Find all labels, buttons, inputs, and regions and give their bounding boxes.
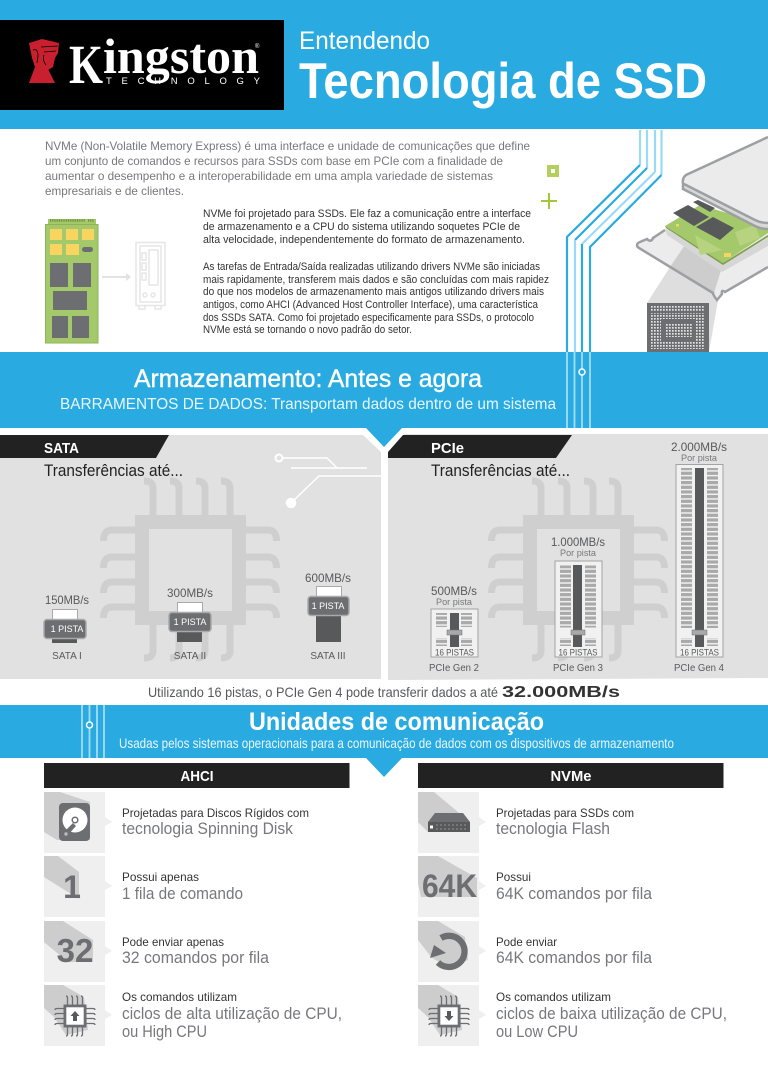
row: 64K commands: 64K comandos por fila <box>496 949 653 967</box>
PCIe Gen 3 slot <box>551 535 605 674</box>
PCIe Gen 4 slot <box>671 440 727 674</box>
icon: green plus <box>541 193 557 209</box>
SATA tag <box>0 435 169 458</box>
transfer heading: Transferências até... <box>44 461 183 480</box>
PCIe Gen 3 slot: Por pista <box>560 548 597 559</box>
NVMe design paragraph <box>203 208 531 246</box>
PCIe summary line: 32.000MB/s <box>502 684 620 701</box>
NVMe header: NVMe <box>550 768 592 785</box>
row: 64K commands: Pode enviar <box>496 935 557 949</box>
arrow: board to device <box>102 273 131 281</box>
SATA III connector: SATA III <box>310 651 346 662</box>
icon: green square <box>547 165 559 177</box>
PCIe Gen 4 slot: 2.000MB/s <box>671 440 727 454</box>
row: low CPU: ou Low CPU <box>496 1023 578 1041</box>
PCIe Gen 4 slot: PCIe Gen 4 <box>674 663 724 674</box>
header band <box>0 0 768 129</box>
SATA I connector: SATA I <box>52 651 82 662</box>
row: one queue: Possui apenas <box>122 870 199 884</box>
AHCI header: AHCI <box>180 768 214 785</box>
AHCI header <box>44 763 350 788</box>
PCIe tag <box>388 435 572 458</box>
NVMe tasks paragraph <box>203 261 549 336</box>
Kingston logo <box>0 20 284 110</box>
heading: Armazenamento: Antes e agora <box>134 365 482 393</box>
NVMe tasks paragraph: mais rapidamente, transferem mais dados e são concluídas com mais rapidez <box>203 274 549 286</box>
intro paragraph <box>45 139 530 198</box>
PCIe Gen 2 slot: PCIe Gen 2 <box>429 663 479 674</box>
header title: Entendendo <box>299 27 430 55</box>
subheading: Usadas pelos sistemas operacionais para a comunicação de dados com os dispositivos de armazenamento <box>119 735 674 751</box>
row: spinning disk: Projetadas para Discos Rígidos com <box>122 806 309 820</box>
top casing <box>683 137 768 229</box>
SATA II connector: 300MB/s <box>167 586 213 600</box>
row: flash: tecnologia Flash <box>496 820 610 838</box>
transfer heading: Transferências até... <box>431 461 570 480</box>
PCIe Gen 3 slot: PCIe Gen 3 <box>553 663 603 674</box>
row: low CPU: ciclos de baixa utilização de CPU, <box>496 1005 727 1023</box>
PCIe tag: PCIe <box>431 440 464 457</box>
Kingston logo: ® <box>255 43 260 50</box>
row: spinning disk: tecnologia Spinning Disk <box>122 820 294 838</box>
row: 64K commands <box>418 921 653 982</box>
heading: Unidades de comunicação <box>249 708 544 736</box>
row: 64K queues <box>418 856 653 917</box>
intro paragraph: aumentar o desempenho e a interoperabilidade em uma ampla variedade de sistemas <box>45 169 493 183</box>
icon: CPU arrow up <box>55 996 95 1036</box>
icon: host device <box>136 242 165 309</box>
NVMe tasks paragraph: As tarefas de Entrada/Saída realizadas utilizando drivers NVMe são iniciadas <box>203 261 540 273</box>
light projection beam <box>647 267 718 352</box>
board shadow <box>665 228 768 272</box>
band: Armazenamento <box>0 352 768 428</box>
SSD exploded illustration <box>637 137 768 352</box>
row: high CPU: ciclos de alta utilização de CPU, <box>122 1005 342 1023</box>
PCIe Gen 4 slot: Por pista <box>681 453 718 464</box>
row: spinning disk <box>44 792 309 853</box>
icon: number 1: 1 <box>63 869 81 905</box>
row: high CPU: ou High CPU <box>122 1023 207 1041</box>
green circuit board <box>665 205 768 263</box>
SATA II connector <box>167 586 213 662</box>
row: high CPU: Os comandos utilizam <box>122 990 237 1004</box>
PCIe Gen 3 slot: 1.000MB/s <box>551 535 605 549</box>
row: 64K queues: Possui <box>496 870 531 884</box>
PCIe Gen 3 slot: 16 PISTAS <box>558 648 598 658</box>
NVMe tasks paragraph: NVMe está se tornando o novo padrão do setor. <box>203 324 412 336</box>
PCIe Gen 2 slot: Por pista <box>436 597 473 608</box>
panel: PCIe <box>388 434 768 680</box>
NVMe design paragraph: NVMe foi projetado para SSDs. Ele faz a comunicação entre a interface <box>203 208 531 220</box>
SATA I connector: 150MB/s <box>45 593 89 607</box>
row: flash <box>418 792 634 853</box>
NVMe header <box>418 763 724 788</box>
SATA II connector: SATA II <box>174 651 206 662</box>
arrow: section pointer <box>366 428 402 447</box>
NVMe design paragraph: de armazenamento e a CPU do sistema utilizando soquetes PCIe de <box>203 221 520 233</box>
NVMe design paragraph: alta velocidade, independentemente do formato de armazenamento. <box>203 234 525 246</box>
row: low CPU: Os comandos utilizam <box>496 990 611 1004</box>
circuit traces <box>276 454 381 508</box>
icon: M.2 SSD board <box>46 219 98 343</box>
SATA III connector: 600MB/s <box>305 571 351 585</box>
PCIe Gen 2 slot: 16 PISTAS <box>435 648 474 658</box>
icon: number 32: 32 <box>57 932 93 969</box>
BGA chip <box>647 303 709 352</box>
arrow: section pointer <box>366 758 402 777</box>
intro paragraph: empresariais e de clientes. <box>45 184 184 198</box>
icon: SSD drive <box>428 813 470 832</box>
PCIe Gen 2 slot: 500MB/s <box>431 584 477 598</box>
PCIe Gen 4 slot: 16 PISTAS <box>680 648 719 658</box>
SATA III connector <box>305 571 351 662</box>
icon: CPU arrow down <box>429 996 469 1036</box>
subheading: BARRAMENTOS DE DADOS: Transportam dados dentro de um sistema <box>60 396 556 413</box>
Kingston logo: K <box>69 34 103 95</box>
flash chips <box>673 205 709 226</box>
panel: SATA <box>0 435 381 679</box>
NVMe tasks paragraph: antigos, como AHCI (Advanced Host Controller Interface), uma característica <box>203 299 539 311</box>
SATA I connector: 1 PISTA <box>51 624 83 634</box>
base plate <box>637 200 768 300</box>
SATA III connector: 1 PISTA <box>312 601 344 611</box>
row: high CPU <box>44 985 342 1046</box>
SATA tag: SATA <box>44 440 79 457</box>
icon: red Kingston head <box>29 39 59 83</box>
icon: refresh <box>430 936 465 967</box>
row: 32 commands: 32 comandos por fila <box>122 949 270 967</box>
column: NVMe <box>418 763 727 1046</box>
plate projection <box>670 242 722 293</box>
header title <box>299 27 707 109</box>
row: 64K queues: 64K comandos por fila <box>496 885 653 903</box>
header title: Tecnologia de SSD <box>299 53 707 109</box>
row: one queue: 1 fila de comando <box>122 885 243 903</box>
PCIe summary line: Utilizando 16 pistas, o PCIe Gen 4 pode transferir dados a até <box>148 684 498 700</box>
NVMe tasks paragraph: do que nos modelos de armazenamento mais antigos utilizando drivers mais <box>203 286 544 298</box>
NVMe tasks paragraph: dos SSDs SATA. Como foi projetado especificamente para SSDs, o protocolo <box>203 312 534 324</box>
SATA II connector: 1 PISTA <box>174 617 206 627</box>
icon: 64K: 64K <box>422 868 477 904</box>
Kingston logo: TECHNOLOGY <box>106 76 261 87</box>
icon: hard disk <box>59 803 90 841</box>
row: 32 commands: Pode enviar apenas <box>122 935 224 949</box>
column: AHCI <box>44 763 350 1046</box>
plate outline <box>637 230 768 300</box>
intro paragraph: um conjunto de comandos e recursos para SSDs com base em PCIe com a finalidade de <box>45 154 503 168</box>
intro paragraph: NVMe (Non-Volatile Memory Express) é uma interface e unidade de comunicações que define <box>45 139 530 153</box>
row: 32 commands <box>44 921 270 982</box>
circuit lines <box>567 130 662 352</box>
row: one queue <box>44 856 243 917</box>
row: flash: Projetadas para SSDs com <box>496 806 634 820</box>
PCIe Gen 2 slot <box>429 584 479 674</box>
Kingston logo: ingston <box>103 28 259 84</box>
SATA I connector <box>44 593 89 662</box>
row: low CPU <box>418 985 727 1046</box>
band: Unidades de comunicação <box>0 705 768 758</box>
